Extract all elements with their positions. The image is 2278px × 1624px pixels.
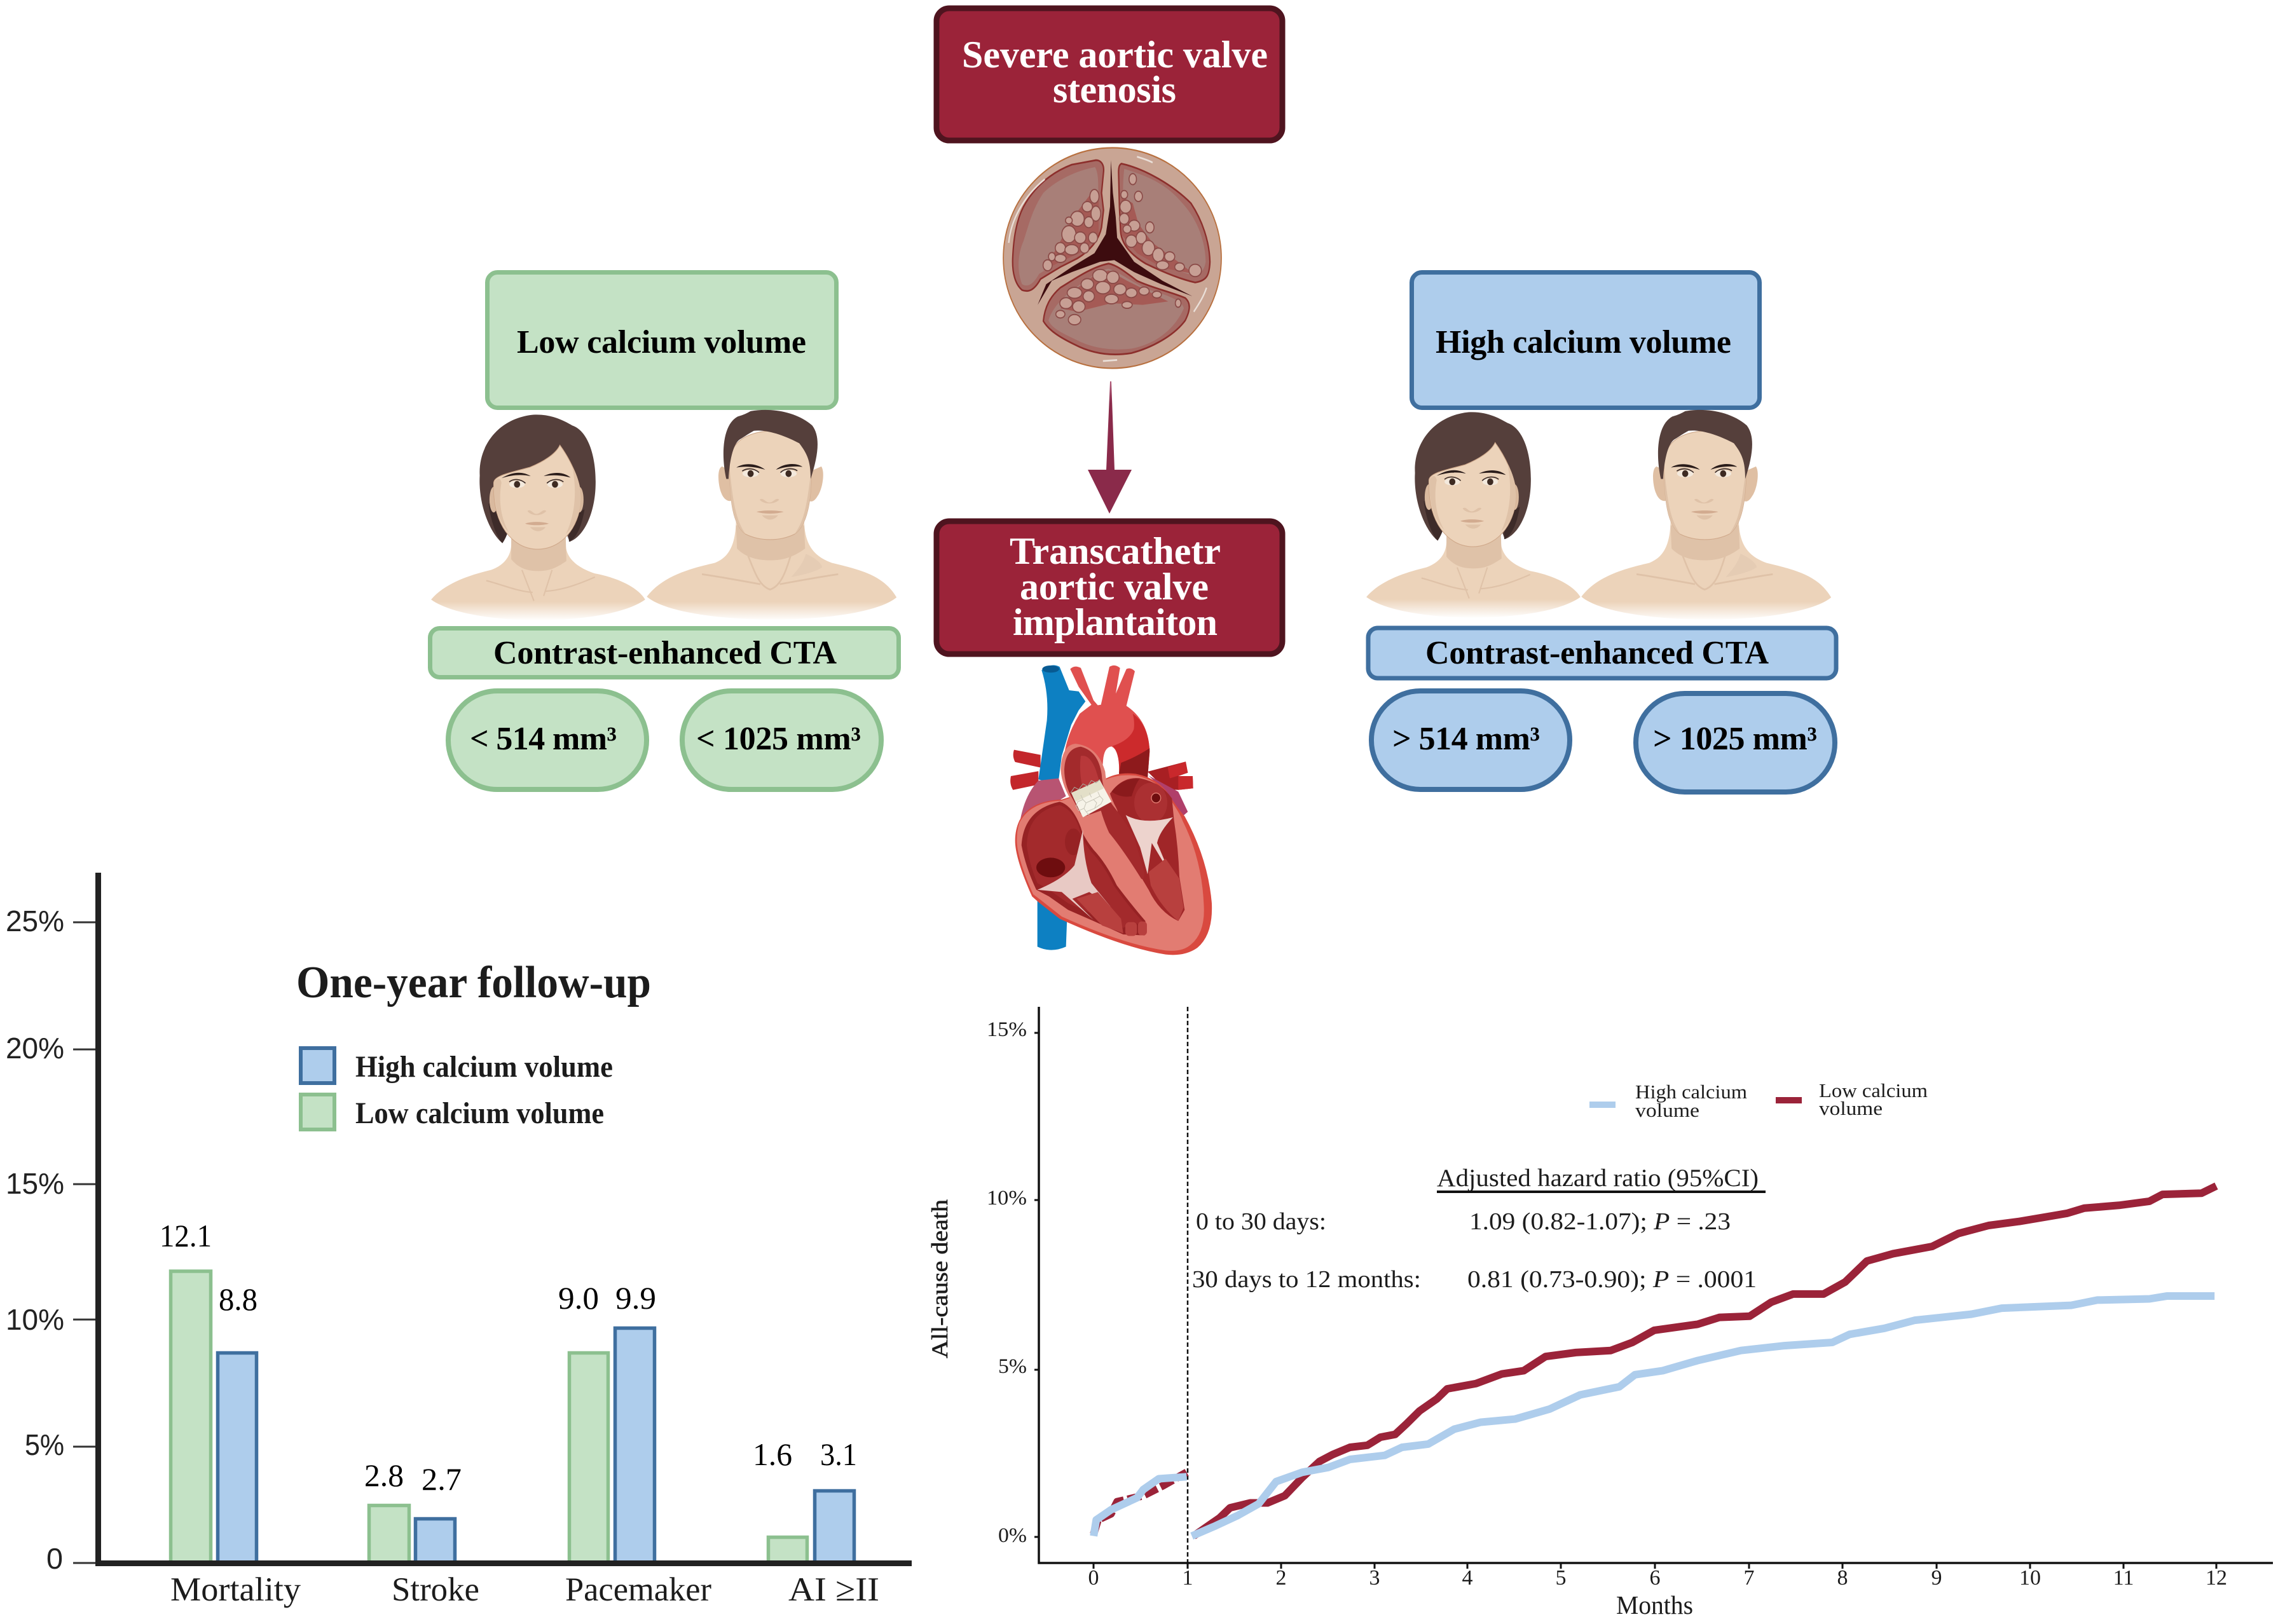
x tick labels: 4 [1462, 1566, 1472, 1590]
x tick labels: 3 [1369, 1566, 1380, 1590]
x tick labels [1088, 1566, 2227, 1590]
box: contrast-enhanced CTA [430, 628, 899, 678]
hazard ratio table: 1.09 (0.82-1.07); P = .23 [1469, 1208, 1731, 1235]
legend: High calcium [1635, 1081, 1747, 1103]
y axis: 15% [6, 1167, 64, 1200]
value labels: 1.6 [753, 1436, 792, 1472]
box: high calcium volume: High calcium volume [1436, 324, 1731, 360]
curve: high calcium volume [1094, 1296, 2214, 1536]
pill: under 514 mm3: < 514 mm³ [470, 721, 617, 757]
box: high calcium volume [1411, 272, 1760, 408]
panel: low calcium volume group [430, 272, 899, 789]
x tick labels: 1 [1183, 1566, 1193, 1590]
x tick labels: 2 [1275, 1566, 1287, 1590]
x tick labels: 7 [1743, 1566, 1755, 1590]
bar chart: one-year follow-up [6, 873, 912, 1608]
y tick labels: 0% [998, 1524, 1027, 1547]
box: severe aortic valve stenosis: Severe aortic valve [962, 34, 1268, 76]
y tick labels [987, 1018, 1027, 1547]
x tick labels: 0 [1088, 1566, 1099, 1590]
x tick labels: 6 [1649, 1566, 1661, 1590]
icon: female patient [1366, 412, 1581, 618]
y tick labels: 15% [987, 1018, 1027, 1041]
category labels: Stroke [392, 1571, 479, 1608]
legend: Low calcium volume [355, 1096, 604, 1130]
y axis title: All-cause death [927, 1199, 952, 1358]
pill: over 514 mm3 [1371, 691, 1570, 789]
pill: under 1025 mm3 [682, 691, 881, 789]
x tick labels: 8 [1837, 1566, 1848, 1590]
legend: Low calcium [1819, 1079, 1928, 1102]
box: transcatheter aortic valve implantation [937, 521, 1282, 654]
bars: stroke [369, 1505, 455, 1562]
bars: pacemaker [570, 1328, 655, 1562]
panel: high calcium volume group [1366, 272, 1836, 792]
curve: low calcium volume [1094, 1186, 2216, 1536]
y axis: 25% [6, 904, 64, 938]
line chart: all-cause death over 12 months [927, 1007, 2273, 1620]
x tick labels: 12 [2206, 1566, 2227, 1590]
pill: over 1025 mm3: > 1025 mm³ [1653, 721, 1817, 757]
chart title: One-year follow-up [296, 958, 651, 1007]
x tick labels: 11 [2113, 1566, 2134, 1590]
value labels: 9.9 [615, 1280, 656, 1316]
legend: volume [1635, 1099, 1699, 1121]
box: transcatheter aortic valve implantation: implantaiton [1013, 601, 1218, 643]
box: transcatheter aortic valve implantation: Transcathetr [1010, 530, 1221, 572]
pill: over 514 mm3: > 514 mm³ [1392, 721, 1540, 757]
legend: High calcium volume [355, 1050, 613, 1084]
box: low calcium volume: Low calcium volume [517, 324, 806, 360]
axes lines [95, 873, 912, 1566]
category labels: Pacemaker [565, 1571, 711, 1608]
box: low calcium volume [487, 272, 837, 408]
x axis title: Months [1616, 1590, 1693, 1620]
category labels: AI ≥II [788, 1571, 879, 1608]
box: contrast-enhanced CTA: Contrast-enhanced CTA [1425, 635, 1769, 671]
box: contrast-enhanced CTA: Contrast-enhanced CTA [493, 635, 837, 671]
arrow: TAVI flow [1088, 381, 1132, 514]
hazard ratio table: 0.81 (0.73-0.90); P = .0001 [1467, 1266, 1757, 1293]
x tick labels: 9 [1931, 1566, 1942, 1590]
y axis: 10% [6, 1303, 64, 1336]
y tick labels: 5% [998, 1355, 1027, 1378]
y axis: 0 [46, 1542, 63, 1575]
bars: aortic insufficiency [768, 1491, 854, 1562]
legend: volume [1819, 1097, 1883, 1119]
pill: under 1025 mm3: < 1025 mm³ [696, 721, 861, 757]
box: transcatheter aortic valve implantation: aortic valve [1020, 566, 1209, 608]
value labels: 2.7 [422, 1461, 462, 1497]
value labels: 9.0 [558, 1280, 599, 1316]
icon: calcified aortic valve [1003, 148, 1221, 368]
hazard ratio table: Adjusted hazard ratio (95%CI) [1437, 1164, 1759, 1192]
value labels: 8.8 [219, 1281, 257, 1317]
y axis: 20% [6, 1032, 64, 1065]
box: severe aortic valve stenosis [937, 8, 1282, 140]
value labels [160, 1218, 857, 1497]
y axis: 5% [25, 1428, 64, 1461]
hazard ratio table [1192, 1164, 1766, 1293]
box: contrast-enhanced CTA [1368, 628, 1836, 678]
category labels [170, 1571, 879, 1608]
y axis [6, 904, 98, 1575]
x tick labels: 5 [1555, 1566, 1567, 1590]
icon: male patient [1581, 410, 1831, 620]
pill: under 514 mm3 [448, 691, 647, 789]
hazard ratio table: 0 to 30 days: [1196, 1208, 1326, 1235]
y tick labels: 10% [987, 1187, 1027, 1210]
category labels: Mortality [170, 1571, 301, 1608]
pill: over 1025 mm3 [1636, 693, 1835, 792]
icon: female patient [431, 414, 645, 620]
bars: mortality [170, 1271, 257, 1563]
value labels: 2.8 [364, 1457, 404, 1493]
value labels: 12.1 [160, 1218, 212, 1253]
icon: male patient [647, 410, 896, 620]
value labels: 3.1 [820, 1436, 857, 1472]
icon: heart with implanted valve [1010, 665, 1212, 955]
legend [1589, 1079, 1928, 1121]
box: severe aortic valve stenosis: stenosis [1053, 69, 1176, 111]
30-day landmark dashed line [1187, 1007, 1188, 1563]
legend [301, 1048, 613, 1130]
hazard ratio table: 30 days to 12 months: [1192, 1266, 1421, 1293]
x tick labels: 10 [2019, 1566, 2041, 1590]
axes and ticks [1034, 1007, 2273, 1569]
